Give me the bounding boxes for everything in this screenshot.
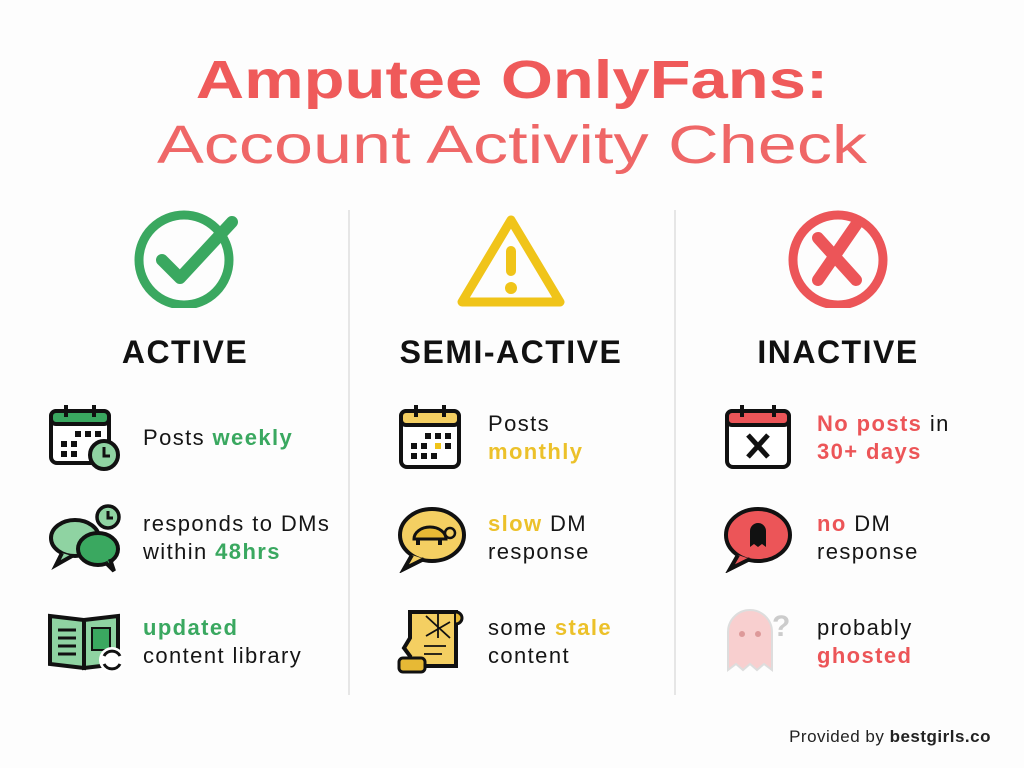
- text: probably ghosted: probably: [817, 615, 913, 640]
- icon: chat bubbles: [49, 504, 121, 572]
- text: slow DM response: slow DM: [488, 511, 587, 536]
- icon: x circle: [788, 210, 888, 308]
- icon: scroll with web: [398, 610, 464, 674]
- text: posts weekly: Posts weekly: [143, 425, 293, 450]
- heading: active: ACTIVE: [122, 334, 248, 370]
- icon: calendar yellow: [399, 405, 461, 469]
- text: no DM response: no DM: [817, 511, 891, 536]
- text: no DM response: response: [817, 539, 919, 564]
- text: responds DMs: within 48hrs: [143, 539, 281, 564]
- icon: warning triangle: [458, 216, 564, 306]
- text: no posts 30+ days: No posts in: [817, 411, 950, 436]
- text: no posts 30+ days: 30+ days: [817, 439, 922, 464]
- text: probably ghosted: ghosted: [817, 643, 912, 668]
- icon: calendar x: [725, 405, 791, 469]
- text: no DM response: [817, 511, 919, 564]
- text: updated content library: [143, 615, 302, 668]
- heading: inactive: INACTIVE: [757, 334, 919, 370]
- text: updated content library: updated: [143, 615, 238, 640]
- icon: book: [48, 614, 122, 670]
- text: updated content library: content library: [143, 643, 302, 668]
- text: posts monthly: Posts: [488, 411, 550, 436]
- icon: turtle bubble: [398, 507, 466, 573]
- panel: active: [134, 210, 238, 308]
- icon: check circle: [134, 210, 238, 308]
- text: responds DMs: [143, 511, 330, 564]
- panel: inactive: [788, 210, 888, 308]
- panel: semi-active: [458, 216, 564, 306]
- text: no posts 30+ days: [817, 411, 950, 464]
- footer credit: Provided by bestgirls.co: [789, 727, 991, 746]
- icon: ghost question: ?: [772, 610, 790, 643]
- icon: ghost question: [727, 609, 790, 672]
- text: some stale content: [488, 615, 612, 668]
- icon: calendar green: [49, 405, 120, 471]
- text: slow DM response: [488, 511, 590, 564]
- title: Account Activity Check: [157, 115, 867, 175]
- text: responds DMs: responds to DMs: [143, 511, 330, 536]
- text: some stale content: content: [488, 643, 570, 668]
- icon: ghost bubble: [724, 507, 792, 573]
- text: some stale content: some stale: [488, 615, 612, 640]
- title: [157, 50, 867, 175]
- text: slow DM response: response: [488, 539, 590, 564]
- text: probably ghosted: [817, 615, 913, 668]
- heading: semi-active: SEMI-ACTIVE: [400, 334, 622, 370]
- text: posts monthly: monthly: [488, 439, 583, 464]
- text: posts monthly: [488, 411, 583, 464]
- title: Amputee OnlyFans:: [196, 50, 828, 110]
